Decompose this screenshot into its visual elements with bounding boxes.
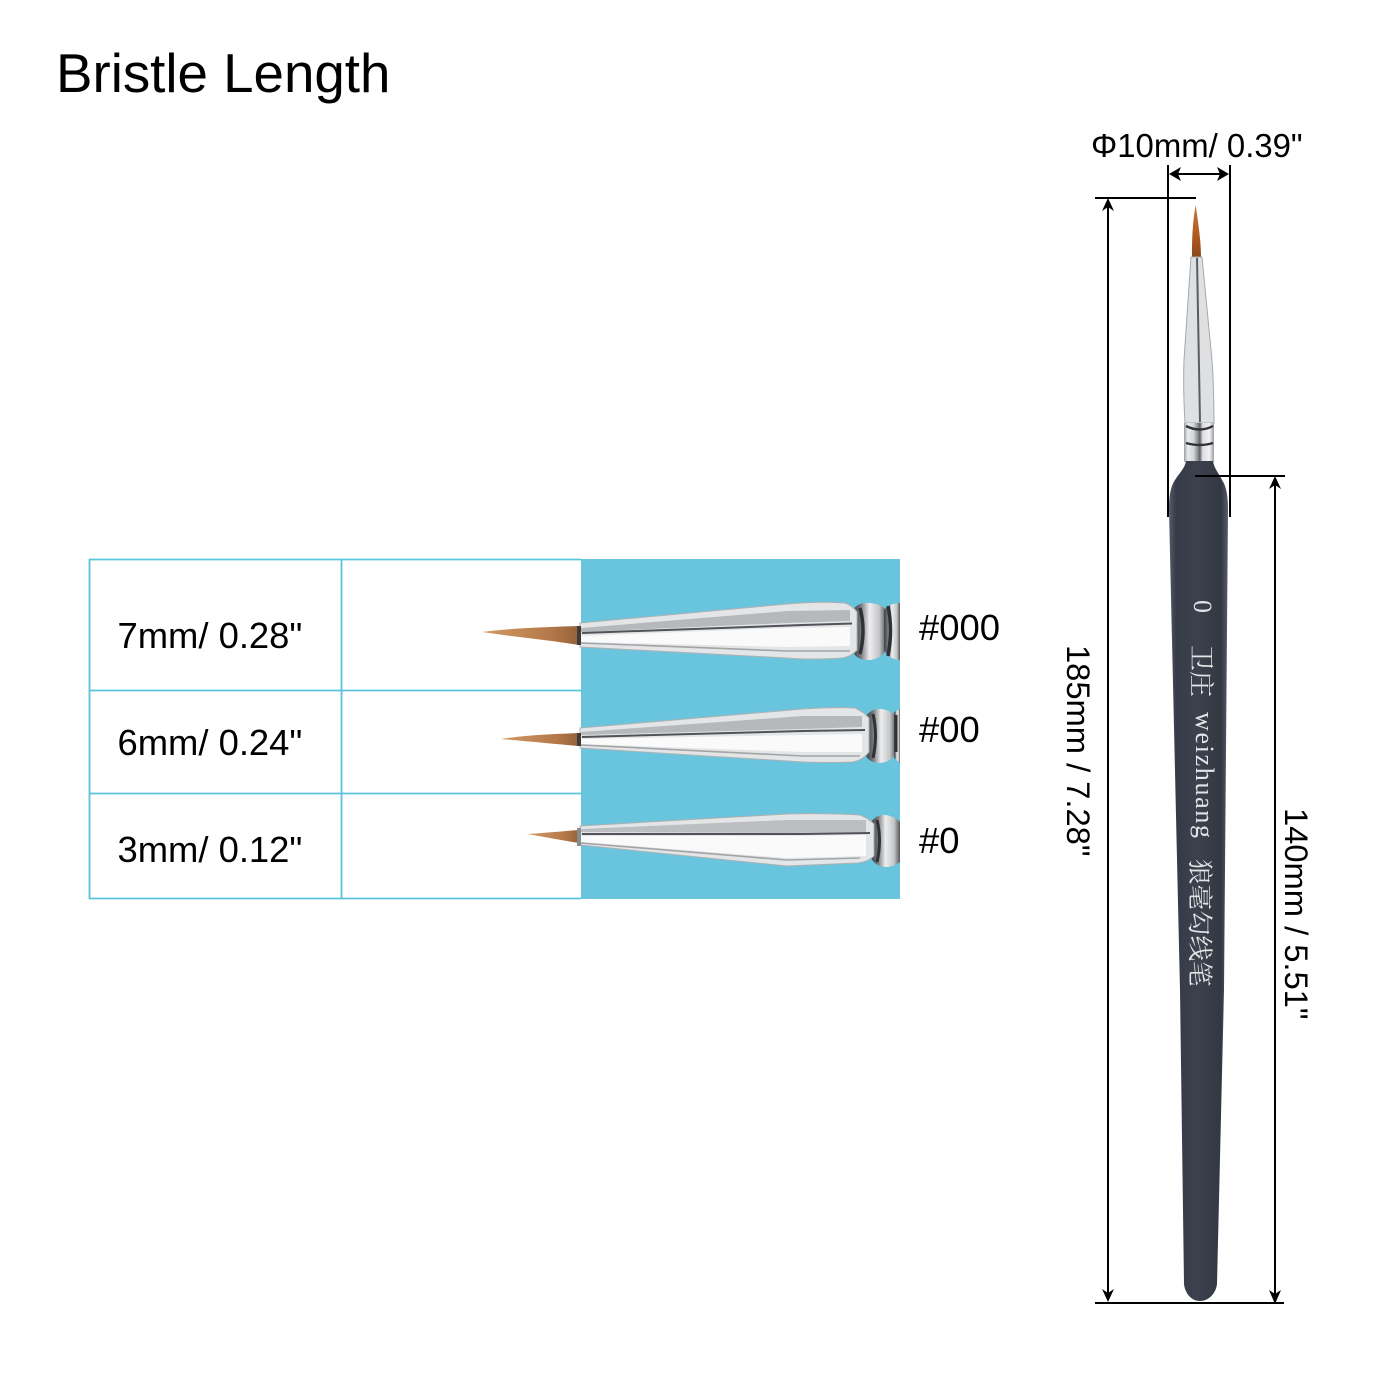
dimension: diameter xyxy=(1091,127,1303,517)
table grid xyxy=(89,559,581,899)
brush #000 xyxy=(482,602,900,660)
label: #000: #000 xyxy=(919,607,1000,648)
label: #00: #00 xyxy=(919,709,980,750)
panel: bristle length table xyxy=(89,559,900,899)
brush #0 xyxy=(527,814,900,867)
total length label: 185mm / 7.28" xyxy=(1060,645,1097,856)
brush #00 xyxy=(501,708,900,763)
diameter label: Φ10mm/ 0.39" xyxy=(1091,127,1303,164)
dimension: total length xyxy=(1060,198,1284,1303)
row label: 3mm: 3mm/ 0.12" xyxy=(118,829,302,870)
ferrule band xyxy=(1184,423,1214,462)
brand name: weizhuang xyxy=(1190,712,1219,838)
metal ferrule xyxy=(1184,257,1214,423)
black handle xyxy=(1169,461,1228,1301)
row label: 6mm: 6mm/ 0.24" xyxy=(118,722,302,763)
full brush, vertical xyxy=(1169,205,1228,1301)
label: #0: #0 xyxy=(919,820,959,861)
bristle tip xyxy=(1192,205,1201,257)
dimension: handle length xyxy=(1195,476,1315,1304)
product characters: 狼毫勾线笔 xyxy=(1185,859,1214,987)
title: Bristle Length xyxy=(56,42,390,104)
size mark: 0 xyxy=(1188,600,1217,613)
row label: 7mm: 7mm/ 0.28" xyxy=(118,615,302,656)
handle length label: 140mm / 5.51" xyxy=(1278,808,1315,1019)
brand characters: 卫庄 xyxy=(1186,645,1215,697)
handle imprint xyxy=(1185,600,1219,987)
blue background panel xyxy=(581,559,900,899)
